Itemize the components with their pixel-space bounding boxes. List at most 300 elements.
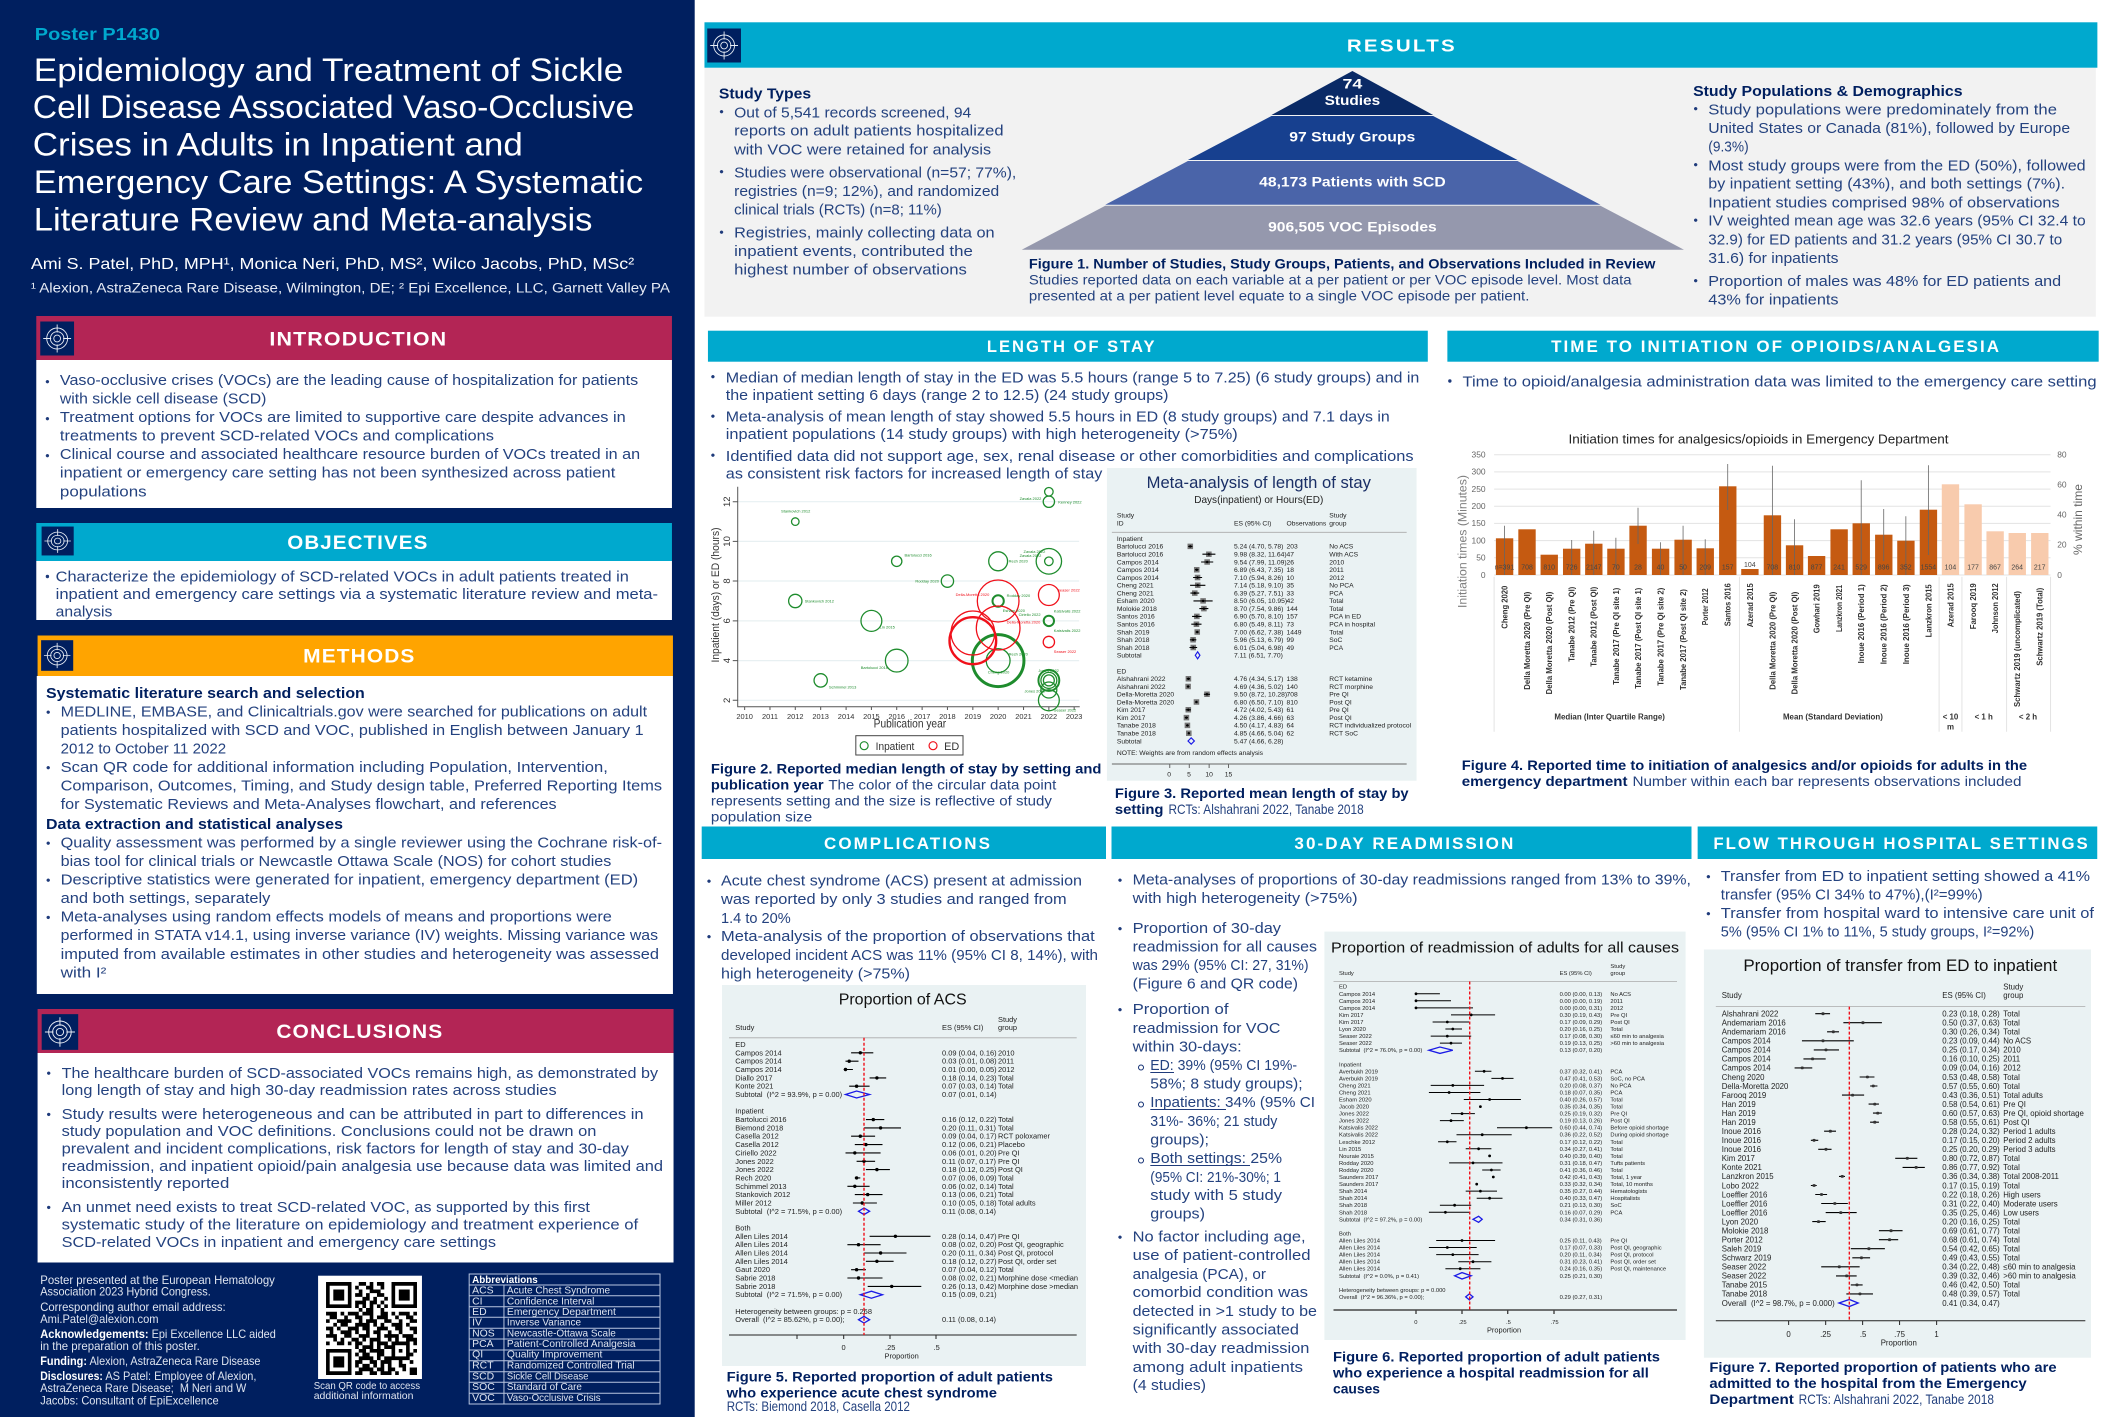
- forest plot: meta-analysis of length of stay: 62: [1287, 730, 1294, 738]
- bar chart: initiation times: Schwartz 2019 (Total): [2036, 587, 2045, 666]
- bar chart: initiation times: 350: [1472, 449, 1486, 460]
- forest plot: transfer from ED to inpatient: Total: [2003, 1163, 2020, 1172]
- bubble chart: median length of stay: Zavala 2022: [1020, 496, 1041, 501]
- pyramid figure: 74: [1342, 75, 1363, 91]
- bar chart: initiation times: Azerad 2015: [1946, 583, 1955, 627]
- bar chart: initiation times: Tanabe 2017 (Post QI site 1): [1634, 587, 1643, 689]
- forest plot: transfer from ED to inpatient: Study: [2003, 982, 2023, 992]
- forest plot: meta-analysis of length of stay: Campos 2014: [1117, 575, 1159, 582]
- forest plot: proportion of ACS: Miller 2012: [735, 1198, 772, 1208]
- footer notes: Ami.Patel@alexion.com: [40, 1314, 159, 1326]
- forest plot: transfer from ED to inpatient: 0.23 (0.09, 0.44): [1942, 1037, 2000, 1046]
- forest plot: transfer from ED to inpatient: 1: [1934, 1330, 1939, 1339]
- forest plot: readmission: Study: [1339, 971, 1354, 977]
- bubble chart: median length of stay: 2016: [888, 712, 905, 721]
- forest plot: meta-analysis of length of stay: 4.85 (4.66, 5.04): [1234, 730, 1283, 738]
- forest plot: transfer from ED to inpatient: 0.36 (0.34, 0.38): [1942, 1172, 2000, 1181]
- forest plot: proportion of ACS: Inpatient: [735, 1107, 765, 1116]
- footer notes: Funding:: [40, 1356, 87, 1368]
- forest plot: transfer from ED to inpatient: Han 2019: [1722, 1118, 1756, 1127]
- abbreviations table: RCT: [472, 1360, 494, 1371]
- bar chart: initiation times: Cheng 2020: [1500, 585, 1509, 629]
- study types text: Study Types: [719, 86, 811, 102]
- forest plot: transfer from ED to inpatient: Lanzkron 2015: [1722, 1172, 1774, 1181]
- bar chart: initiation times: Inoue 2016 (Period 3): [1902, 584, 1911, 664]
- forest plot: meta-analysis of length of stay: RCT morphine: [1329, 684, 1373, 691]
- forest plot: meta-analysis of length of stay: group: [1329, 521, 1347, 528]
- opioid bullet: Time to opioid/analgesia administration data was limited to the emergency care setting: [1462, 375, 2097, 391]
- forest plot: proportion of ACS: Post QI, protocol: [998, 1248, 1054, 1258]
- forest plot: meta-analysis of length of stay: Shah 2019: [1117, 629, 1150, 636]
- forest plot: readmission: Heterogeneity between groups: p = 0.000: [1339, 1288, 1446, 1294]
- length of stay bullets: inpatient populations (14 study groups) with high heterogeneity (>75%): [726, 427, 1238, 443]
- bar chart: initiation times: Farooq 2019: [1969, 583, 1978, 629]
- forest plot: readmission: Seaser 2022: [1339, 1034, 1372, 1040]
- forest plot: readmission: group: [1610, 971, 1625, 977]
- bubble chart: median length of stay: Inpatient: [876, 741, 914, 753]
- bar chart: initiation times: Della Moretta 2020 (Pre QI): [1768, 591, 1777, 690]
- footer notes: Alexion, AstraZeneca Rare Disease: [89, 1356, 260, 1368]
- bubble chart: median length of stay: 2023: [1066, 712, 1082, 721]
- abbreviations table: Sickle Cell Disease: [507, 1371, 589, 1382]
- readmission bullets: within 30-days:: [1131, 1040, 1242, 1056]
- bar chart: initiation times: 209: [1699, 564, 1711, 571]
- figure 2 caption: population size: [711, 809, 812, 824]
- forest plot: transfer from ED to inpatient: Proportion: [1881, 1338, 1917, 1348]
- forest plot: proportion of ACS: Casella 2012: [735, 1140, 779, 1149]
- conclusions text: inconsistently reported: [62, 1176, 229, 1192]
- forest plot: readmission: Rodday 2020: [1339, 1161, 1374, 1167]
- bar chart: initiation times: 0: [1481, 570, 1486, 580]
- study types text: clinical trials (RCTs) (n=8; 11%): [734, 203, 942, 219]
- forest plot: readmission: Hematologists: [1610, 1189, 1647, 1195]
- forest plot: transfer from ED to inpatient: group: [2003, 991, 2024, 1000]
- bubble chart: median length of stay: Cheng 2020: [988, 669, 1010, 674]
- forest plot: meta-analysis of length of stay: 4.69 (4.36, 5.02): [1234, 684, 1283, 691]
- abbreviations table: Acute Chest Syndrome: [507, 1285, 610, 1297]
- forest plot: meta-analysis of length of stay: Bartolucci 2016: [1117, 544, 1164, 551]
- methods text: Comparison, Outcomes, Timing, and Study design table, Preferred Reporting Items: [61, 779, 662, 795]
- forest plot: transfer from ED to inpatient: 2011: [2003, 1055, 2020, 1064]
- forest plot: transfer from ED to inpatient: Total: [2003, 1073, 2020, 1082]
- forest plot: transfer from ED to inpatient: Tanabe 2018: [1722, 1290, 1768, 1299]
- forest plot: proportion of ACS: Schimmel 2013: [735, 1182, 787, 1191]
- figure 2 caption: publication year: [711, 777, 824, 792]
- forest plot: readmission: ED: [1339, 985, 1347, 991]
- methods text: 2012 to October 11 2022: [61, 741, 226, 758]
- forest plot: readmission: Shah 2018: [1339, 1203, 1367, 1209]
- complications bullets: Meta-analysis of the proportion of observations that: [721, 929, 1095, 945]
- forest plot: proportion of ACS: group: [998, 1023, 1017, 1032]
- forest plot: meta-analysis of length of stay: Inpatient: [1117, 536, 1143, 543]
- forest plot: transfer from ED to inpatient: Kim 2017: [1722, 1154, 1755, 1163]
- forest plot: meta-analysis of length of stay: PCA in ED: [1329, 614, 1361, 621]
- bar chart: initiation times: Johnson 2012: [1991, 583, 2000, 633]
- forest plot: readmission: Shah 2018: [1339, 1210, 1367, 1216]
- forest plot: readmission: 0.40 (0.39, 0.40): [1560, 1154, 1602, 1160]
- bar chart: initiation times: Tanabe 2012 (Pre QI): [1568, 586, 1577, 662]
- figure 2 caption: Figure 2. Reported median length of stay by setting and: [711, 761, 1101, 776]
- QR caption: [314, 1381, 420, 1402]
- forest plot: proportion of ACS: 0.11 (0.08, 0.14): [942, 1315, 997, 1324]
- forest plot: transfer from ED to inpatient: 0.17 (0.15, 0.19): [1942, 1181, 2000, 1190]
- forest plot: meta-analysis of length of stay: 6.39 (5.27, 7.51): [1234, 590, 1283, 597]
- bar chart: initiation times: 40: [2057, 509, 2067, 520]
- forest plot: proportion of ACS: Study: [998, 1015, 1017, 1024]
- study populations text: United States or Canada (81%), followed by Europe: [1708, 121, 2070, 137]
- forest plot: readmission: 0.40 (0.33, 0.47): [1560, 1196, 1602, 1202]
- panel: flow through hospital settings: [1698, 826, 2097, 1407]
- bar chart: initiation times: 877: [1811, 564, 1822, 571]
- bubble chart: median length of stay: Publication year: [874, 719, 946, 731]
- panel: length of stay: [708, 331, 1428, 824]
- methods text: performed in STATA v14.1, using inverse variance (IV) weights. Missing variance was: [61, 928, 658, 944]
- forest plot: readmission: 0.17 (0.09, 0.29): [1560, 1020, 1602, 1026]
- readmission bullets: readmission for all causes: [1133, 939, 1317, 955]
- heading: methods: METHODS: [303, 647, 415, 668]
- forest plot: meta-analysis of length of stay: 73: [1287, 621, 1294, 629]
- forest plot: readmission: 0.25 (0.21, 0.30): [1560, 1274, 1602, 1280]
- complications bullets: high heterogeneity (>75%): [721, 966, 910, 982]
- forest plot: proportion of ACS: Campos 2014: [735, 1065, 782, 1074]
- forest plot: readmission: Jacob 2020: [1339, 1105, 1369, 1111]
- forest plot: transfer from ED to inpatient: 0.30 (0.26, 0.34): [1942, 1028, 2000, 1037]
- forest plot: proportion of ACS: Jones 2022: [735, 1165, 774, 1174]
- readmission bullets: [1118, 873, 1691, 1394]
- forest plot: transfer from ED to inpatient: Inoue 2016: [1722, 1136, 1762, 1145]
- forest plot: proportion of ACS: Total: [998, 1182, 1014, 1191]
- forest plot: proportion of ACS: 0.13 (0.06, 0.21): [942, 1190, 997, 1199]
- forest plot: readmission: Allen Liles 2014: [1339, 1253, 1381, 1259]
- forest plot: readmission: 0.19 (0.13, 0.26): [1560, 1119, 1602, 1125]
- forest plot: readmission: Post QI, order set: [1610, 1260, 1656, 1266]
- forest plot: proportion of ACS: Total: [998, 1082, 1014, 1091]
- forest plot: proportion of ACS: 0.10 (0.05, 0.18): [942, 1198, 997, 1208]
- bar chart: initiation times: Lanzkron 2021: [1835, 585, 1844, 632]
- objectives bullet: inpatient and emergency care settings via a systematic literature review and meta-: [56, 587, 658, 603]
- forest plot: meta-analysis of length of stay: 2011: [1329, 567, 1344, 574]
- objectives bullet: [46, 570, 658, 621]
- abbreviations table: ACS: [472, 1285, 494, 1297]
- readmission bullets: analgesia (PCA), or: [1133, 1267, 1266, 1283]
- heading: readmission: [1112, 826, 1692, 859]
- bar chart: initiation times: Tanabe 2017 (Pre QI site 1): [1612, 587, 1621, 685]
- bar chart: initiation times: 810: [1543, 564, 1555, 571]
- study types text: reports on adult patients hospitalized: [734, 124, 1004, 140]
- forest plot: readmission: 0.35 (0.34, 0.35): [1560, 1105, 1602, 1111]
- forest plot: readmission: Total: [1610, 1147, 1623, 1153]
- forest plot: transfer from ED to inpatient: Total adults: [2003, 1091, 2043, 1100]
- forest plot: readmission: Kim 2017: [1339, 1020, 1364, 1026]
- bubble chart: median length of stay: Kenney 2022: [1058, 499, 1082, 504]
- forest plot: transfer from ED to inpatient: Moderate users: [2003, 1199, 2058, 1208]
- forest plot: meta-analysis of length of stay: 2012: [1329, 575, 1344, 582]
- introduction bullets: Clinical course and associated healthcare resource burden of VOCs treated in an: [60, 447, 640, 463]
- abbreviations table: PCA: [472, 1339, 494, 1350]
- forest plot: proportion of ACS: Overall (I^2 = 85.62%, p = 0.00);: [735, 1315, 845, 1324]
- forest plot: readmission: 0.42 (0.41, 0.43): [1560, 1175, 1602, 1181]
- forest plot: meta-analysis of length of stay: Meta-analysis of length of stay: [1147, 473, 1371, 492]
- readmission bullets: use of patient-controlled: [1133, 1248, 1310, 1264]
- forest plot: transfer from ED to inpatient: High users: [2003, 1190, 2041, 1199]
- conclusions text: systematic study of the literature on epidemiology and treatment experience of: [62, 1217, 639, 1233]
- forest plot: proportion of ACS: 0.16 (0.12, 0.22): [942, 1115, 997, 1124]
- forest plot: readmission: Total: [1610, 1027, 1623, 1033]
- readmission bullets: study with 5 study: [1150, 1188, 1283, 1204]
- forest plot: proportion of ACS: Placebo: [998, 1140, 1025, 1149]
- forest plot: readmission: 0.33 (0.32, 0.34): [1560, 1182, 1602, 1188]
- forest plot: proportion of ACS: Pre QI: [998, 1157, 1020, 1166]
- readmission bullets: groups);: [1150, 1132, 1209, 1148]
- forest plot: transfer from ED to inpatient: .5: [1860, 1330, 1867, 1339]
- methods text: Quality assessment was performed by a single reviewer using the Cochrane risk-of-: [61, 835, 662, 851]
- forest plot: proportion of ACS: 0.07 (0.06, 0.09): [942, 1173, 997, 1182]
- bubble chart: median length of stay: Esham 2020: [1003, 608, 1026, 613]
- bar chart: initiation times: Schwartz 2019 (uncomplicated): [2013, 591, 2022, 707]
- footer notes: Association 2023 Hybrid Congress.: [40, 1287, 211, 1299]
- forest plot: readmission: Post QI: [1610, 1119, 1630, 1125]
- heading: conclusions: [38, 1009, 674, 1053]
- study populations text: IV weighted mean age was 32.6 years (95% CI 32.4 to: [1708, 214, 2086, 230]
- forest plot: proportion of ACS: Heterogeneity between groups: p = 0.268: [735, 1307, 872, 1316]
- forest plot: transfer from ED to inpatient: Total: [2003, 1018, 2020, 1028]
- poster number: Poster P1430: [35, 24, 160, 44]
- forest plot: proportion of ACS: 0: [842, 1343, 846, 1352]
- bar chart: initiation times: 241: [1833, 564, 1845, 571]
- bubble chart: median length of stay: Katsivalis 2022: [1054, 628, 1080, 633]
- title: Cell Disease Associated Vaso-Occlusive: [33, 89, 634, 125]
- forest plot: readmission: 0.21 (0.13, 0.30): [1560, 1203, 1602, 1209]
- objectives bullet: analysis: [56, 605, 112, 621]
- forest plot: meta-analysis of length of stay: Tanabe 2018: [1117, 723, 1156, 730]
- forest plot: transfer from ED to inpatient: 0.43 (0.36, 0.51): [1942, 1091, 2000, 1100]
- forest plot: transfer from ED to inpatient: Total: [2003, 1181, 2020, 1190]
- forest plot: transfer from ED to inpatient: Inoue 2016: [1722, 1127, 1762, 1136]
- readmission bullets: with high heterogeneity (>75%): [1131, 891, 1358, 907]
- abbreviations table: Emergency Department: [507, 1307, 616, 1318]
- length of stay bullets: Meta-analysis of mean length of stay showed 5.5 hours in ED (8 study groups) and 7.1 days in: [726, 410, 1390, 426]
- bubble chart: median length of stay: 8: [722, 578, 733, 584]
- forest plot: proportion of ACS: Biemond 2018: [735, 1123, 783, 1132]
- forest plot: meta-analysis of length of stay: Bartolucci 2016: [1117, 551, 1164, 559]
- forest plot: readmission: 0.20 (0.08, 0.37): [1560, 1083, 1602, 1089]
- bar chart: initiation times: Gowhari 2019: [1813, 584, 1822, 633]
- bar chart: initiation times: 250: [1472, 484, 1486, 494]
- forest plot: readmission: 0: [1414, 1320, 1418, 1326]
- forest plot: readmission: Seaser 2022: [1339, 1041, 1372, 1047]
- forest plot: readmission: Subtotal (I^2 = 0.0%, p = 0.41): [1339, 1274, 1419, 1280]
- forest plot: transfer from ED to inpatient: No ACS: [2003, 1037, 2031, 1046]
- objectives bullet: Characterize the epidemiology of SCD-related VOCs in adult patients treated in: [56, 570, 629, 586]
- forest plot: readmission: Post QI, maintenance: [1610, 1267, 1666, 1273]
- forest plot: transfer from ED to inpatient: 0.60 (0.57, 0.63): [1942, 1109, 2000, 1118]
- forest plot: readmission: 2011: [1610, 999, 1623, 1005]
- forest plot: proportion of ACS: 0.03 (0.01, 0.08): [942, 1057, 997, 1066]
- forest plot: transfer from ED to inpatient: Lobo 2022: [1722, 1181, 1759, 1190]
- forest plot: readmission: Subtotal (I^2 = 97.2%, p = 0.00): [1339, 1217, 1422, 1223]
- forest plot: proportion of ACS: Allen Liles 2014: [735, 1240, 788, 1249]
- heading: introduction: INTRODUCTION: [269, 330, 447, 351]
- forest plot: proportion of ACS: Sabrie 2018: [735, 1274, 775, 1282]
- bubble chart: median length of stay: 10: [722, 536, 733, 547]
- forest plot: proportion of ACS: Both: [735, 1224, 751, 1232]
- heading: methods: [38, 636, 673, 676]
- bar chart: initiation times: m: [1947, 722, 1954, 732]
- forest plot: meta-analysis of length of stay: 5.96 (5.13, 6.79): [1234, 637, 1283, 644]
- forest plot: readmission: Total: [1610, 1168, 1623, 1174]
- forest plot: proportion of ACS: Total: [998, 1123, 1014, 1132]
- flow bullets: Transfer from ED to inpatient setting showed a 41%: [1721, 869, 2090, 885]
- forest plot: meta-analysis of length of stay: 33: [1287, 590, 1294, 597]
- forest plot: transfer from ED to inpatient: Overall (I^2 = 98.7%, p = 0.000): [1722, 1299, 1835, 1308]
- bubble chart: median length of stay: Bartolucci 2016: [904, 553, 932, 558]
- methods text: Scan QR code for additional information including Population, Intervention,: [61, 760, 608, 776]
- forest plot: meta-analysis of length of stay: 1449: [1287, 629, 1302, 636]
- bar chart: initiation times: 100: [1472, 535, 1486, 545]
- bar chart: initiation times: 104: [1744, 562, 1756, 569]
- forest plot: meta-analysis of length of stay: 61: [1287, 707, 1294, 714]
- bar chart: initiation times: Della Moretta 2020 (Post QI): [1791, 591, 1799, 694]
- forest plot: proportion of ACS: Bartolucci 2016: [735, 1115, 787, 1124]
- forest plot: proportion of ACS: 0.07 (0.01, 0.14): [942, 1090, 997, 1099]
- forest plot: transfer from ED to inpatient: Konte 2021: [1722, 1163, 1762, 1172]
- forest plot: readmission: 0.17 (0.07, 0.33): [1560, 1246, 1602, 1252]
- figure 7 caption: [1709, 1360, 2057, 1407]
- bubble chart: median length of stay: 2010: [736, 712, 753, 721]
- forest plot: transfer from ED to inpatient: Han 2019: [1722, 1109, 1756, 1118]
- forest plot: readmission: 0.17 (0.08, 0.30): [1560, 1034, 1602, 1040]
- introduction bullets: Treatment options for VOCs are limited to supportive care despite advances in: [60, 410, 626, 426]
- bubble chart: median length of stay: 2013: [812, 712, 829, 721]
- forest plot: readmission: ES (95% CI): [1560, 971, 1592, 977]
- forest plot: transfer from ED to inpatient: 0.20 (0.16, 0.25): [1942, 1217, 2000, 1226]
- abbreviations table: Randomized Controlled Trial: [507, 1360, 635, 1371]
- forest plot: readmission: 0.24 (0.16, 0.35): [1560, 1267, 1602, 1273]
- readmission bullets: groups): [1150, 1207, 1205, 1223]
- forest plot: proportion of ACS: 2012: [998, 1065, 1015, 1074]
- forest plot: readmission: Averbukh 2019: [1339, 1069, 1378, 1075]
- bubble chart: median length of stay: Katsivalis 2022: [1054, 609, 1080, 614]
- length of stay bullets: Median of median length of stay in the ED was 5.5 hours (range 5 to 7.25) (6 study groups) and in: [726, 370, 1419, 386]
- bar chart: initiation times: Tanabe 2017 (Pre QI site 2): [1657, 587, 1666, 686]
- forest plot: meta-analysis of length of stay: Santos 2016: [1117, 621, 1155, 629]
- forest plot: proportion of ACS: .25: [885, 1343, 895, 1352]
- forest plot: proportion of ACS: Pre QI: [998, 1148, 1020, 1157]
- figure 2 caption: The color of the circular data point: [828, 777, 1057, 792]
- forest plot: readmission: 0.00 (0.00, 0.31): [1560, 1006, 1602, 1012]
- bubble chart: median length of stay: Ciriello 2022: [1019, 612, 1041, 617]
- footer notes: Epi Excellence LLC aided: [152, 1329, 276, 1341]
- abbreviations table: SOC: [472, 1382, 495, 1393]
- figure 5 caption: Figure 5. Reported proportion of adult patients: [727, 1370, 1053, 1385]
- forest plot: meta-analysis of length of stay: 9.98 (8.32, 11.64): [1234, 551, 1287, 559]
- methods text: with I²: [59, 965, 107, 981]
- forest plot: transfer from ED to inpatient: 0.39 (0.32, 0.46): [1942, 1272, 2000, 1281]
- forest plot: meta-analysis of length of stay: Total: [1329, 629, 1344, 636]
- forest plot: readmission: Esham 2020: [1339, 1098, 1372, 1104]
- forest plot: transfer from ED to inpatient: Total: [2003, 1290, 2020, 1299]
- forest plot: readmission: 0.00 (0.00, 0.13): [1560, 992, 1602, 998]
- forest plot: readmission: Cheng 2021: [1339, 1090, 1371, 1096]
- forest plot: meta-analysis of length of stay: 9.50 (8.72, 10.28): [1234, 692, 1287, 699]
- forest plot: transfer from ED to inpatient: Total: [2003, 1082, 2020, 1091]
- forest plot: readmission: [1324, 932, 1686, 1340]
- complications bullets: [707, 874, 1098, 982]
- forest plot: meta-analysis of length of stay: Santos 2016: [1117, 614, 1155, 621]
- forest plot: proportion of ACS: Total: [998, 1115, 1014, 1124]
- forest plot: readmission: Total: [1610, 1098, 1623, 1104]
- figure 4 caption: emergency department: [1462, 774, 1628, 789]
- forest plot: readmission: No ACS: [1610, 992, 1631, 998]
- forest plot: proportion of ACS: 0.06 (0.02, 0.14): [942, 1182, 997, 1191]
- figure 7 caption: Figure 7. Reported proportion of patients who are: [1709, 1360, 2057, 1375]
- forest plot: transfer from ED to inpatient: [1704, 950, 2091, 1358]
- abbreviations table: Vaso-Occlusive Crisis: [507, 1393, 601, 1404]
- bubble chart: median length of stay: Seaser 2022: [1054, 649, 1076, 654]
- forest plot: proportion of ACS: RCT poloxamer: [998, 1132, 1050, 1141]
- forest plot: transfer from ED to inpatient: Loeffler 2016: [1722, 1199, 1768, 1208]
- heading: length of stay: LENGTH OF STAY: [987, 338, 1157, 356]
- forest plot: readmission: Post QI, protocol: [1610, 1253, 1654, 1259]
- forest plot: meta-analysis of length of stay: Kim 2017: [1117, 707, 1146, 714]
- forest plot: transfer from ED to inpatient: Lyon 2020: [1722, 1217, 1759, 1226]
- forest plot: readmission: 0.13 (0.07, 0.20): [1560, 1048, 1602, 1054]
- forest plot: meta-analysis of length of stay: 5: [1187, 772, 1191, 779]
- forest plot: readmission: Rodday 2020: [1339, 1168, 1374, 1174]
- methods text: MEDLINE, EMBASE, and Clinicaltrials.gov were searched for publications on adult: [61, 704, 647, 720]
- forest plot: proportion of ACS: Allen Liles 2014: [735, 1232, 788, 1241]
- bubble chart: median length of stay: 4: [722, 658, 733, 663]
- footer notes: AS Patel: Employee of Alexion,: [105, 1371, 256, 1383]
- forest plot: proportion of ACS: ED: [735, 1040, 746, 1049]
- forest plot: readmission: Post QI, geographic: [1610, 1246, 1662, 1252]
- introduction bullets: with sickle cell disease (SCD): [59, 392, 266, 408]
- forest plot: readmission: Before opioid shortage: [1610, 1126, 1669, 1132]
- footer notes: in the preparation of this poster.: [40, 1341, 200, 1353]
- forest plot: meta-analysis of length of stay: Della-Moretta 2020: [1117, 699, 1174, 706]
- conclusions text: prevalent and incident complications, risk factors for length of stay and 30-day: [62, 1142, 630, 1158]
- readmission bullets: Proportion of: [1133, 1002, 1230, 1018]
- readmission bullets: with 30-day readmission: [1131, 1341, 1309, 1357]
- bubble chart: median length of stay: Bartolucci 2016: [861, 665, 889, 670]
- forest plot: meta-analysis of length of stay: 64: [1287, 723, 1294, 730]
- forest plot: readmission: Nouraie 2015: [1339, 1154, 1374, 1160]
- forest plot: meta-analysis of length of stay: Molokie 2018: [1117, 606, 1157, 613]
- forest plot: meta-analysis of length of stay: 6.89 (6.43, 7.35): [1234, 567, 1283, 574]
- panel: time to initiation of opioids: [1447, 331, 2099, 789]
- forest plot: proportion of ACS: Total: [998, 1265, 1014, 1274]
- forest plot: meta-analysis of length of stay: 6.90 (5.70, 8.10): [1234, 614, 1283, 621]
- abbreviations table: Newcastle-Ottawa Scale: [507, 1328, 616, 1339]
- forest plot: proportion of ACS: 0.20 (0.11, 0.34): [942, 1248, 997, 1258]
- forest plot: readmission: Lin 2015: [1339, 1147, 1361, 1153]
- study types text: registries (n=9; 12%), and randomized: [734, 184, 999, 200]
- forest plot: meta-analysis of length of stay: 810: [1287, 699, 1298, 706]
- forest plot: transfer from ED to inpatient: >60 min to analgesia: [2003, 1272, 2076, 1281]
- forest plot: proportion of ACS: Subtotal (I^2 = 71.5%, p = 0.00): [735, 1290, 843, 1299]
- study populations text: Most study groups were from the ED (50%), followed: [1708, 158, 2086, 174]
- forest plot: meta-analysis of length of stay: Pre QI: [1329, 692, 1349, 699]
- forest plot: readmission: Katsivalis 2022: [1339, 1133, 1378, 1139]
- bar chart: initiation times: Median (Inter Quartile Range): [1554, 712, 1665, 721]
- complications bullets: was reported by only 3 studies and ranged from: [720, 892, 1067, 908]
- bar chart: initiation times: Azerad 2015: [1746, 583, 1755, 627]
- left column background: [0, 0, 695, 1417]
- bar chart: initiation times: 50: [1476, 553, 1486, 563]
- title: Crises in Adults in Inpatient and: [33, 126, 523, 163]
- forest plot: proportion of ACS: 0.11 (0.07, 0.17): [942, 1157, 997, 1166]
- forest plot: readmission: 0.31 (0.23, 0.41): [1560, 1260, 1602, 1266]
